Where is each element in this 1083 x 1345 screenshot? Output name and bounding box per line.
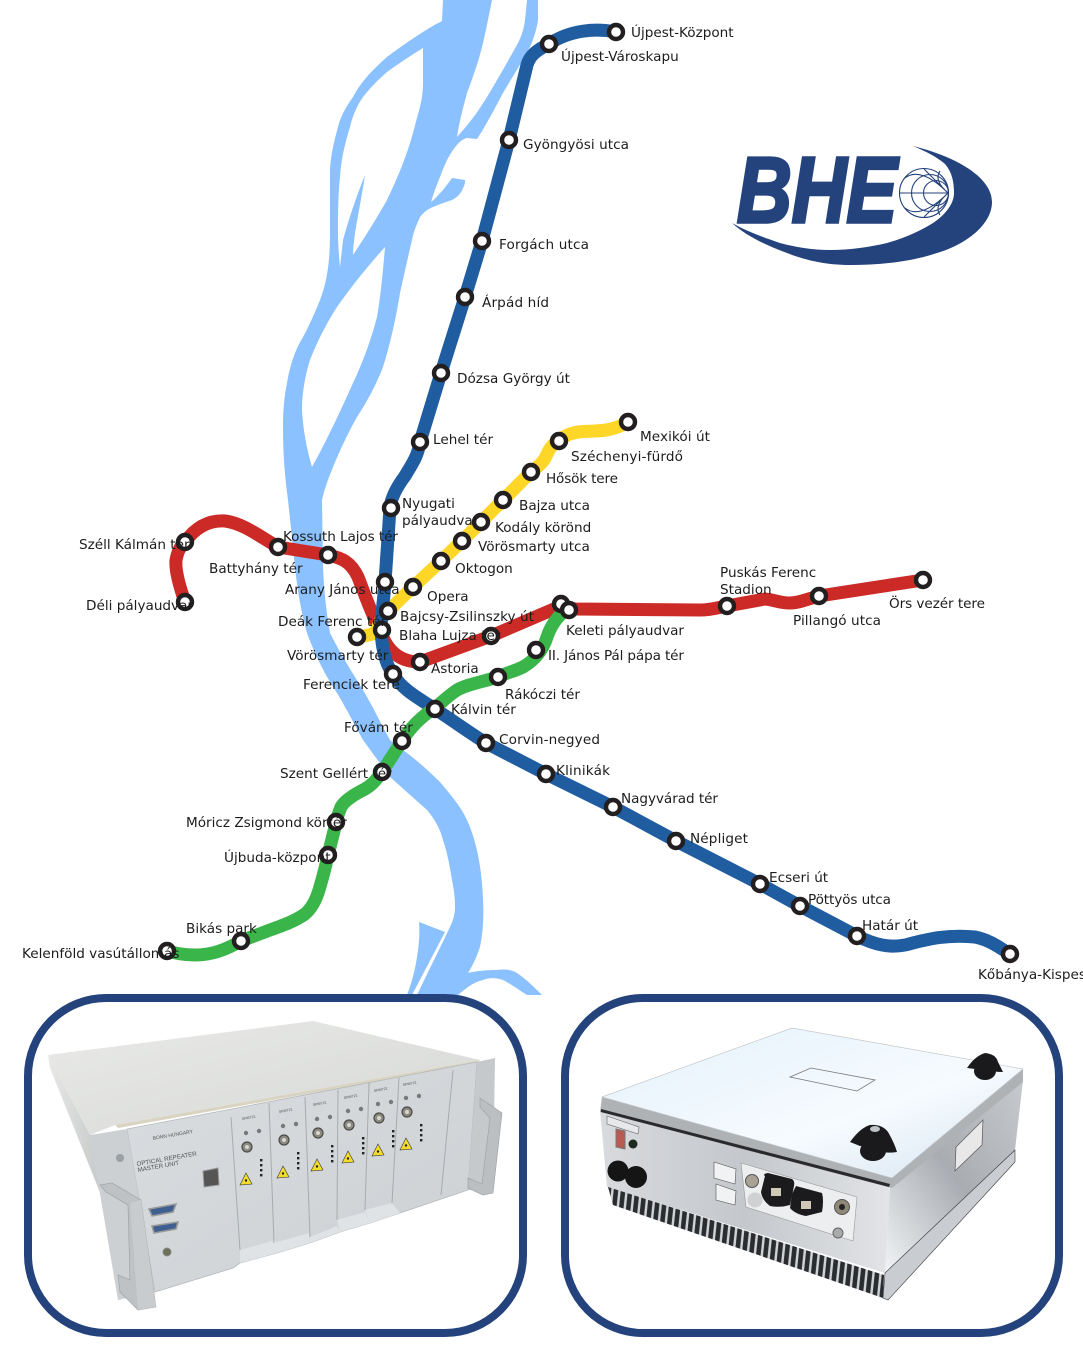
station labels M3: Újpest-Városkapu: [561, 47, 679, 65]
stations M3: [375, 25, 1017, 961]
station labels M2: Örs vezér tere: [889, 594, 985, 612]
station labels M3: Gyöngyösi utca: [523, 137, 629, 153]
station labels M2: Széll Kálmán tér: [79, 537, 190, 553]
station labels M1: Bajza utca: [519, 498, 590, 514]
logo wordmark: BHE: [737, 138, 899, 242]
station labels M3: Arany János utca: [285, 582, 400, 598]
module captions: SRM721: [402, 1081, 417, 1087]
station labels M3: Újpest-Központ: [631, 23, 734, 41]
module captions: [241, 1081, 417, 1121]
power connectors: [608, 1160, 628, 1182]
heatsink fins: [608, 1187, 884, 1298]
station labels M3: Határ út: [862, 918, 918, 934]
river island: right channel: [457, 0, 527, 137]
station labels M3: Corvin-negyed: [499, 732, 600, 748]
station labels M1: Mexikói út: [640, 429, 710, 445]
station labels M3: Deák Ferenc tér: [278, 614, 387, 630]
station labels M2: Astoria: [431, 661, 479, 677]
station labels M2: Keleti pályaudvar: [566, 623, 684, 639]
metro line M4 green route: [167, 609, 567, 955]
station labels M2: Déli pályaudvar: [86, 598, 193, 614]
station labels M3: [278, 23, 1083, 983]
station labels M3: Nagyvárad tér: [621, 791, 718, 807]
brand mark: BONN HUNGARY: [152, 1129, 194, 1142]
station labels M2: Pillangó utca: [793, 613, 881, 629]
river island: Margaret: [302, 247, 385, 467]
station labels M3: Dózsa György út: [457, 371, 570, 387]
remote unit enclosure: [600, 1028, 1023, 1300]
station labels M4: Fővám tér: [344, 720, 413, 736]
stations M4: [160, 603, 576, 958]
antenna connector: [834, 1200, 850, 1214]
photo frame: outdoor remote unit: [565, 998, 1059, 1333]
lid rim: [600, 1069, 1023, 1188]
BHE logo: [732, 138, 992, 265]
station labels M3: Nyugati: [402, 496, 455, 512]
ethernet port: [203, 1168, 219, 1187]
photo frame: optical repeater master unit: [28, 998, 523, 1333]
station labels M1: Hősök tere: [546, 471, 618, 487]
station labels M2: [79, 529, 985, 677]
station labels M2: Puskás Ferenc: [720, 565, 816, 581]
station labels M3: Kálvin tér: [451, 702, 516, 718]
river island: Csepel sliver: [407, 922, 445, 995]
front plate: [600, 1110, 890, 1273]
station labels M2: Stadion: [720, 582, 772, 598]
station labels M2: Blaha Lujza tér: [399, 628, 501, 644]
station labels M4: Bikás park: [186, 921, 257, 937]
stations M1: [350, 415, 635, 644]
metro line M3 blue route: [381, 30, 1010, 954]
panel heading: OPTICAL REPEATER: [136, 1150, 198, 1168]
label tags: [714, 1162, 736, 1205]
beige edge: [115, 1060, 480, 1128]
transceiver modules: [240, 1129, 262, 1185]
heatsink base: [883, 1150, 1015, 1300]
station labels M4: Rákóczi tér: [505, 687, 580, 703]
status LED: [163, 1248, 171, 1256]
station labels M4: [22, 648, 684, 962]
logo Smith chart globe: [900, 168, 948, 218]
station labels M3: Pöttyös utca: [808, 892, 891, 908]
station labels M1: Széchenyi-fürdő: [571, 449, 683, 465]
station labels M3: Ecseri út: [769, 870, 828, 886]
module captions: SRM721: [343, 1094, 358, 1100]
front panel: [127, 1062, 477, 1292]
fibre connectors: [761, 1173, 794, 1207]
right handle: [468, 1098, 502, 1195]
module dividers: [231, 1070, 453, 1250]
station labels M3: Árpád híd: [482, 293, 549, 311]
station labels M4: Móricz Zsigmond körtér: [186, 815, 347, 831]
station labels M1: Vörösmarty tér: [287, 648, 389, 664]
stations M2: [178, 535, 930, 669]
left handle: [100, 1183, 156, 1310]
Danube river: [283, 0, 542, 995]
module captions: SRM721: [278, 1108, 293, 1114]
serial port panel: [607, 1116, 639, 1134]
station labels M1: Opera: [427, 589, 469, 605]
station labels M1: [287, 429, 710, 664]
station labels M4: Újbuda-központ: [224, 848, 331, 866]
station labels M4: II. János Pál pápa tér: [548, 648, 684, 664]
serial ports: [149, 1204, 178, 1233]
rack ears: [90, 1129, 155, 1300]
station labels M3: Ferenciek tere: [303, 677, 400, 693]
lid: [602, 1028, 1023, 1178]
metro line M2 red route: [176, 521, 923, 662]
chassis top: [48, 1021, 480, 1135]
station labels M2: Battyhány tér: [209, 561, 303, 577]
station labels M3: Klinikák: [556, 763, 610, 779]
knob large: [850, 1125, 897, 1161]
station labels M3: Forgách utca: [499, 237, 589, 253]
chassis left side: [48, 1055, 103, 1200]
connector plate: [741, 1163, 857, 1241]
station labels M4: Szent Gellért tér: [280, 766, 392, 782]
river island: Szentendre tip: [338, 48, 423, 267]
station labels M2: Kossuth Lajos tér: [283, 529, 398, 545]
station labels M1: Bajcsy-Zsilinszky út: [400, 609, 534, 625]
module flaps: [240, 1203, 400, 1263]
side safety label: [955, 1120, 983, 1171]
station labels M1: Vörösmarty utca: [478, 539, 590, 555]
metro line M1 yellow route: [357, 422, 628, 637]
module captions: SRM721: [241, 1115, 256, 1121]
logo swoosh: [732, 146, 992, 265]
master unit chassis: [48, 1021, 502, 1310]
station labels M3: Lehel tér: [433, 432, 493, 448]
module captions: SRM721: [312, 1101, 327, 1107]
station labels M1: Oktogon: [455, 561, 513, 577]
module captions: SRM721: [373, 1087, 388, 1093]
panel subheading: MASTER UNIT: [137, 1160, 180, 1174]
station labels M3: pályaudvar: [402, 513, 479, 529]
right side: [885, 1080, 1023, 1273]
RF connector: [746, 1174, 758, 1188]
station labels M1: Kodály körönd: [495, 520, 591, 536]
station labels M3: Népliget: [690, 831, 748, 847]
station labels M4: Kelenföld vasútállomás: [22, 946, 179, 962]
knob small: [967, 1053, 1003, 1080]
lid label: [790, 1068, 875, 1091]
